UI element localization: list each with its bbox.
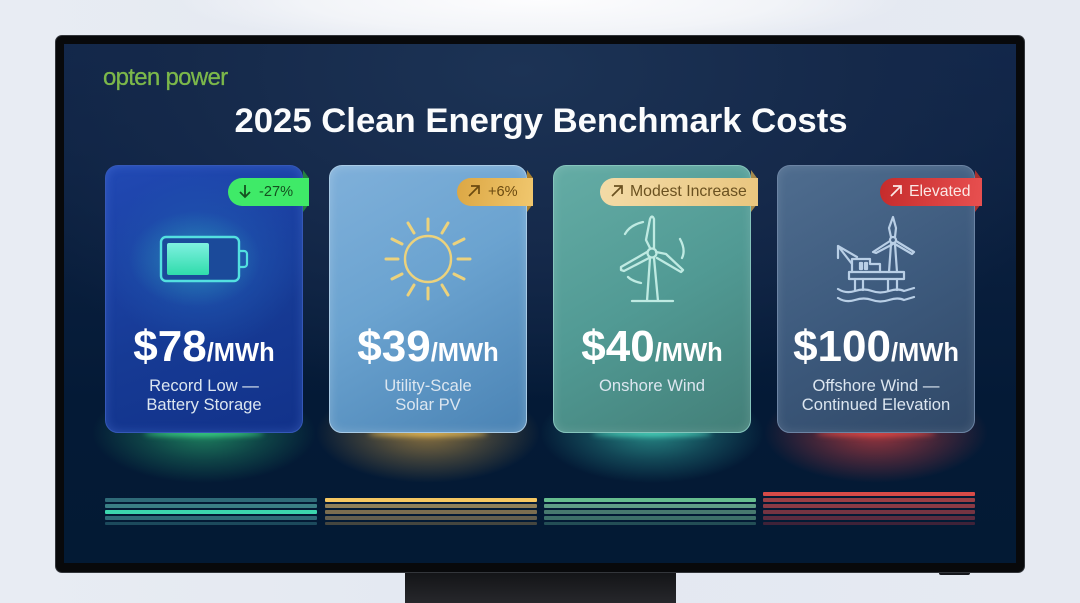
logo: opten power xyxy=(103,64,227,91)
glow line: green xyxy=(144,431,264,436)
badge fold: offshore xyxy=(975,170,981,212)
price: solar: $39/MWh xyxy=(357,322,499,371)
bars: offshore xyxy=(763,492,975,525)
label: offshore xyxy=(802,376,950,414)
price: wind: $40/MWh xyxy=(581,322,723,371)
title: 2025 Clean Energy Benchmark Costs xyxy=(234,102,848,140)
glow line: amber xyxy=(368,431,488,436)
badge: modest increase xyxy=(600,178,758,206)
badge: elevated xyxy=(880,178,982,206)
price: offshore: $100/MWh xyxy=(793,322,959,371)
monitor button xyxy=(939,572,970,575)
panel: wind xyxy=(553,165,751,433)
label: offshore: Offshore Wind — xyxy=(813,376,939,395)
panel: offshore xyxy=(777,165,975,433)
glow: green xyxy=(92,383,316,483)
icon: offshore platform xyxy=(836,216,916,303)
glow: amber xyxy=(316,383,540,483)
label: solar: Utility-Scale xyxy=(384,376,472,395)
icon: battery xyxy=(140,219,250,300)
badge fold: solar xyxy=(527,170,533,212)
bars: solar xyxy=(325,498,537,525)
monitor screen xyxy=(64,44,1016,563)
label: wind: Onshore Wind xyxy=(599,376,705,395)
badge fold: battery xyxy=(303,170,309,212)
badge: elevated: Elevated xyxy=(909,183,970,200)
icon: wind turbine xyxy=(620,215,685,302)
badge: -27% xyxy=(228,178,309,206)
label: offshore: Continued Elevation xyxy=(802,395,950,414)
glow line: red xyxy=(816,431,936,436)
panel: solar xyxy=(329,165,527,433)
badge: -27%: -27% xyxy=(259,184,293,200)
glow line: teal xyxy=(592,431,712,436)
monitor stand xyxy=(405,572,676,603)
label: battery: Record Low — xyxy=(149,376,259,395)
badge: +6%: +6% xyxy=(488,184,518,200)
panel: battery storage xyxy=(105,165,303,433)
icon: sun xyxy=(384,218,472,300)
label: solar xyxy=(384,376,472,414)
price: battery: $78/MWh xyxy=(133,322,275,371)
label: battery: Battery Storage xyxy=(146,395,262,414)
bars: battery xyxy=(105,498,317,525)
badge fold: wind xyxy=(751,170,757,212)
glow: red xyxy=(764,383,988,483)
label: battery xyxy=(146,376,262,414)
badge: modest increase: Modest Increase xyxy=(630,183,747,200)
glow: teal xyxy=(540,383,764,483)
label: solar: Solar PV xyxy=(395,395,461,414)
badge: +6% xyxy=(457,178,533,206)
bars: wind xyxy=(544,498,756,525)
